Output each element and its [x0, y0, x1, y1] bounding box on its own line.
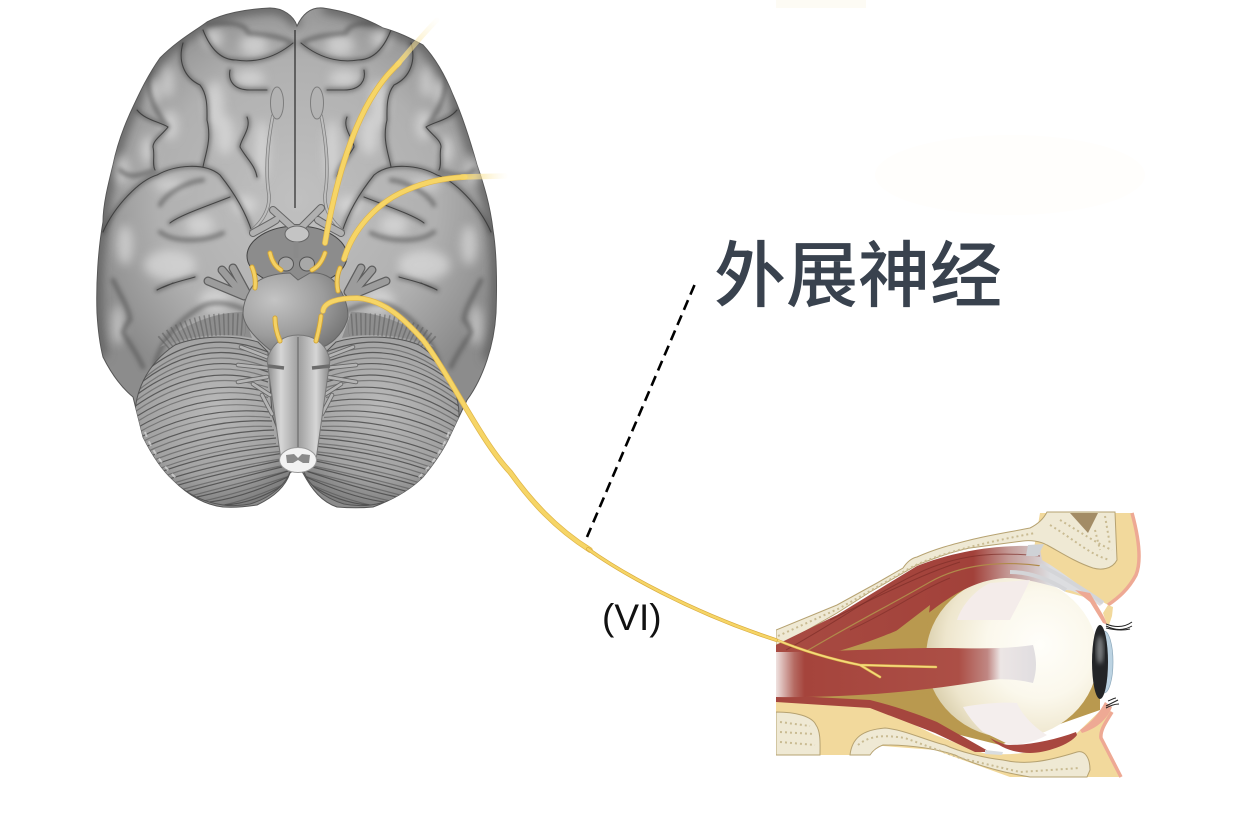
- pituitary: [285, 226, 309, 242]
- illustration: brain inferior view: [97, 8, 497, 511]
- brain surface folds: [97, 8, 497, 510]
- trigeminal root: [208, 268, 246, 296]
- gold wedge above lateral rectus: [896, 605, 930, 631]
- cornea and iris: [1092, 625, 1113, 699]
- right hemisphere folds (mirror): [301, 23, 491, 510]
- brain cerebrum silhouette: [97, 8, 497, 508]
- superior muscles: [776, 544, 1103, 660]
- cerebellum rim white flecks: [145, 432, 178, 480]
- superior oblique tendon fan: [957, 580, 1030, 620]
- small yellow cranial nerve stubs: [252, 253, 340, 341]
- nerve branches on lateral rectus: [772, 638, 936, 677]
- label: (VI): (VI): [602, 597, 662, 638]
- title: 外展神经: [714, 237, 1002, 317]
- upper orbital bone: [776, 512, 1117, 645]
- medulla and spinal cord: [267, 335, 330, 472]
- illustration: eye orbit cross-section: [772, 512, 1139, 777]
- gold wedge below lateral rectus: [870, 693, 940, 720]
- lateral rectus muscle: [776, 645, 1036, 697]
- bone cavity: [1070, 513, 1098, 533]
- cranial rootlets: [238, 347, 272, 414]
- eyeball: [926, 576, 1098, 738]
- cerebellum hemisphere: [134, 337, 291, 510]
- rim shading: [97, 8, 497, 360]
- nerve: abducens main trunk: [323, 298, 776, 640]
- nerve: upper fading nerve: [325, 20, 437, 243]
- pons: [243, 273, 348, 350]
- spinal cord cross-section: [280, 448, 316, 472]
- leader line: dashed: [587, 285, 694, 537]
- faint background smudges: [776, 0, 1145, 215]
- optic chiasm and midbrain: [247, 208, 347, 286]
- inferior muscles: [776, 693, 1077, 755]
- orbital fat: [808, 588, 1100, 745]
- upper fat and skin: [1030, 513, 1139, 605]
- olfactory tract and bulb: [250, 87, 284, 232]
- pale band of folia above cerebellum: [160, 312, 252, 347]
- lower bone and skin: [776, 698, 1121, 777]
- eyelids and lashes: [1075, 590, 1132, 733]
- superior tendons: [1026, 544, 1044, 556]
- nerve: middle fading nerve: [344, 176, 505, 259]
- midline fissure: [295, 30, 296, 215]
- left hemisphere folds: [103, 23, 293, 510]
- inferior tendon fan: [963, 703, 1047, 745]
- inferior oblique: [990, 732, 1077, 753]
